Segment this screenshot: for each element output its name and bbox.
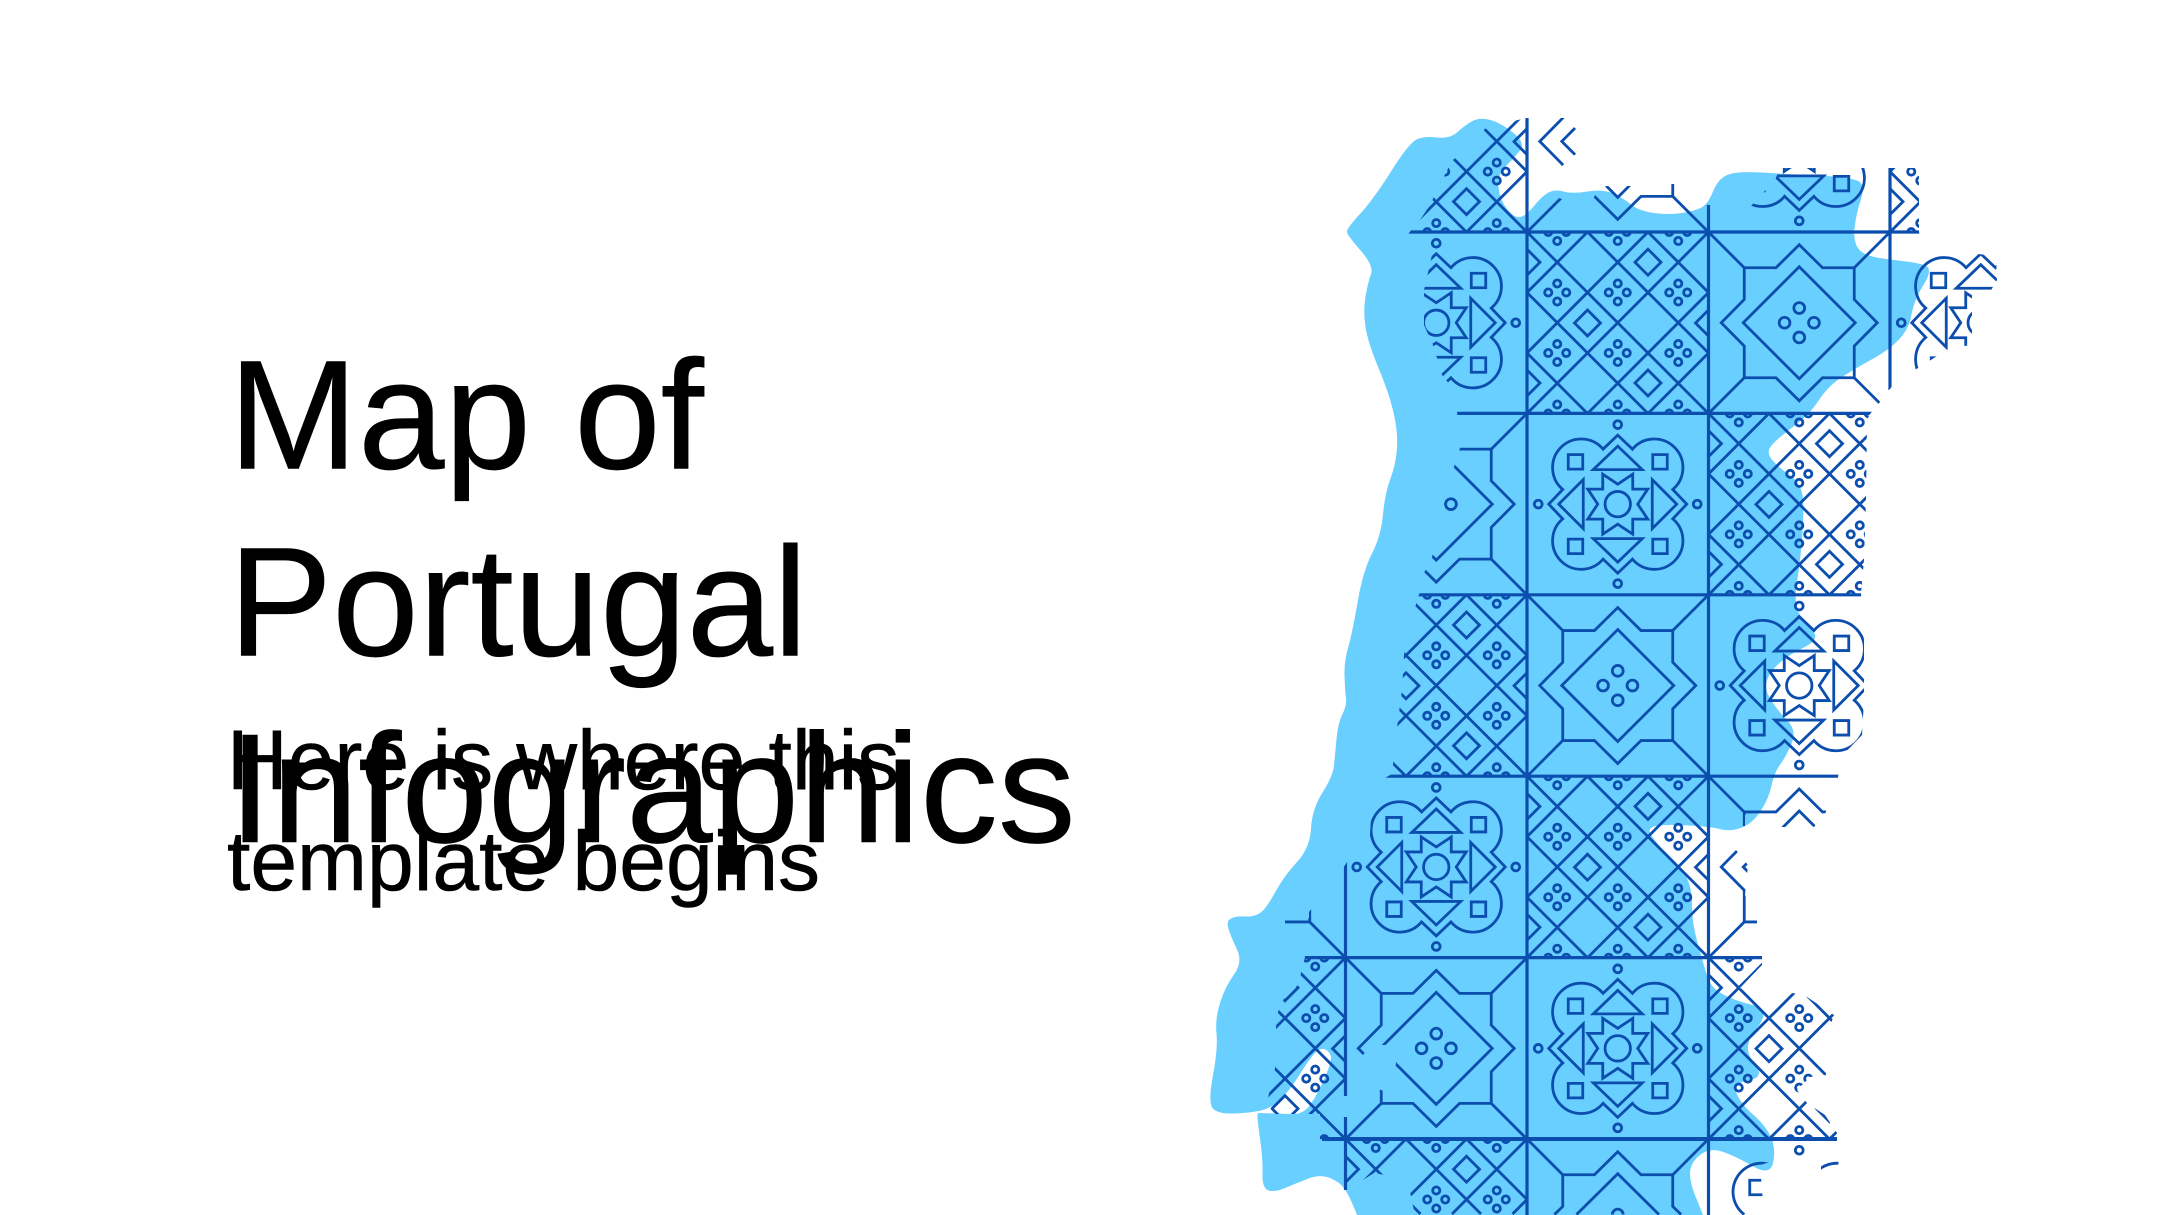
flower tile cut by the bottom edge [1732,1145,1838,1215]
title: Map of [228,328,704,502]
tile row 2 [1424,415,1870,594]
tile row 5 [1268,959,1837,1140]
lattice tile cut by the bottom edge [1346,1139,1527,1214]
title: Infographics [228,701,1076,875]
tile grid lines [1290,100,1930,1215]
subtitle: template begins [227,814,820,908]
map of Portugal silhouette [1210,119,1929,1215]
octagon tile cut by the bottom edge [1527,1139,1708,1215]
tile mosaic clipped to the map [1164,47,2072,1215]
tile row 1 [1424,234,1997,412]
tile row 3 [1388,596,1864,776]
title: Portugal [228,514,808,688]
gaps in the tile pattern [1343,1045,1396,1117]
subtitle: Here is where this [227,713,899,807]
tile row 4 [1285,778,1826,956]
tile row above the grid [1418,118,1919,230]
